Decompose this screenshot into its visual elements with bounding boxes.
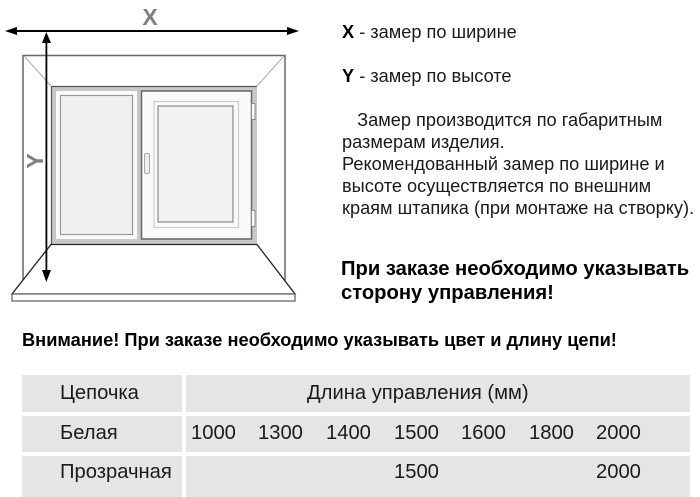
header row <box>22 375 690 412</box>
measurement description <box>342 110 694 218</box>
row: white: 2000 <box>596 422 641 444</box>
row: white: 1300 <box>258 422 303 444</box>
legend X: X - замер по ширине <box>342 22 517 42</box>
window sill <box>12 244 295 301</box>
handle <box>144 154 150 174</box>
window measurement diagram <box>5 4 299 302</box>
table: chain length <box>22 375 690 497</box>
row: transparent: 2000 <box>596 461 641 483</box>
row: white: 1800 <box>529 422 574 444</box>
row: white: 1400 <box>326 422 371 444</box>
control side notice: сторону управления! <box>341 282 554 304</box>
label X: X <box>142 4 158 30</box>
measurement description: Замер производится по габаритным <box>357 110 662 130</box>
header row: Цепочка <box>60 382 139 404</box>
right sash <box>142 91 255 239</box>
arrow X <box>5 27 299 35</box>
chain notice: Внимание! При заказе необходимо указывать цвет и длину цепи! <box>22 329 617 350</box>
wall opening frame <box>23 56 285 281</box>
row: white: 1500 <box>394 422 439 444</box>
legend Y: Y - замер по высоте <box>342 66 512 86</box>
row: transparent: Прозрачная <box>60 461 172 483</box>
label Y: Y <box>22 153 48 169</box>
arrow Y <box>42 32 51 282</box>
header row: Длина управления (мм) <box>307 382 529 404</box>
left sash <box>56 91 137 239</box>
row: white <box>22 416 690 452</box>
control side notice: При заказе необходимо указывать <box>341 258 689 280</box>
control side notice <box>341 258 689 304</box>
window <box>51 86 257 244</box>
row: white: Белая <box>60 422 118 444</box>
row: transparent: 1500 <box>394 461 439 483</box>
measurement description: краям штапика (при монтаже на створку). <box>342 198 694 218</box>
measurement description: Рекомендованный замер по ширине и <box>342 154 665 174</box>
hinges <box>252 104 255 120</box>
measurement description: высоте осуществляется по внешним <box>342 176 651 196</box>
row: white: 1600 <box>461 422 506 444</box>
measurement description: размерам изделия. <box>342 132 505 152</box>
row: transparent <box>22 456 690 497</box>
row: white: 1000 <box>191 422 236 444</box>
